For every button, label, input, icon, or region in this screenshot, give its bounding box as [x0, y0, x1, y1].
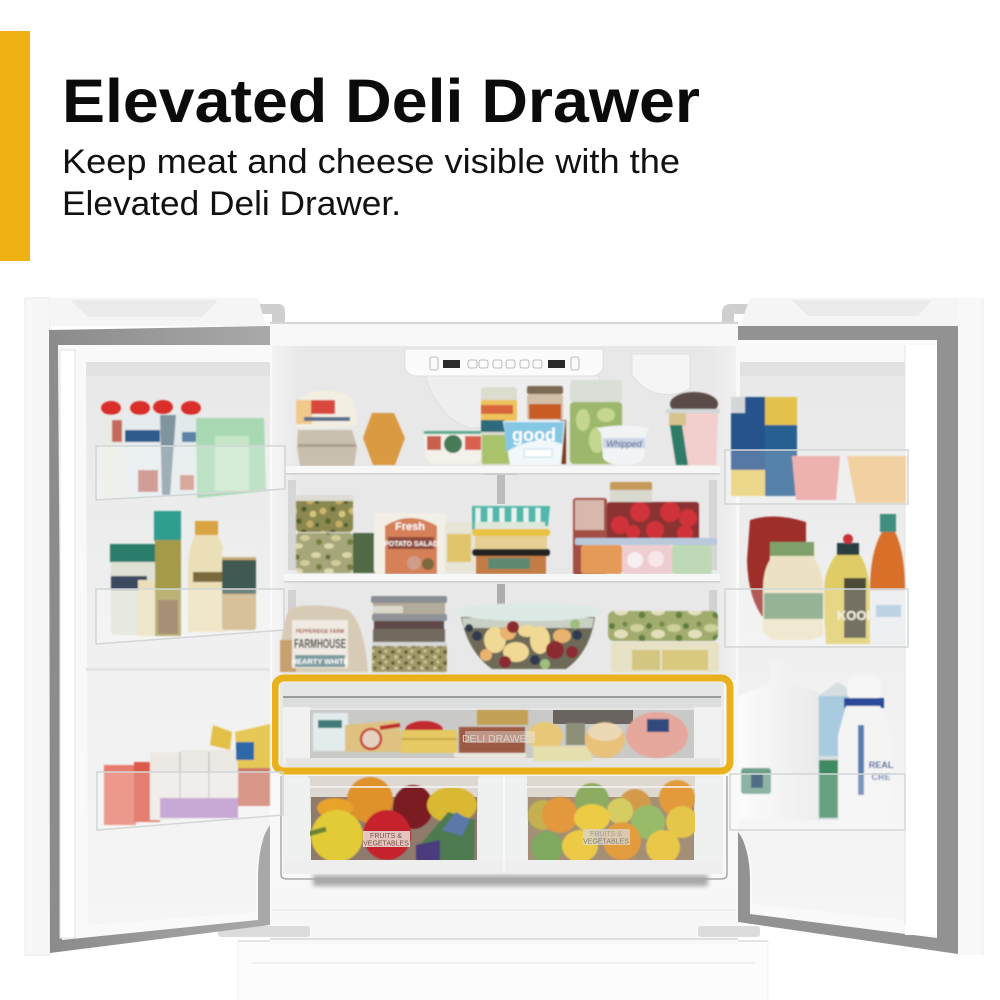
parfait cup [666, 392, 720, 465]
left door bin 3 [97, 772, 283, 830]
farmhouse bread: FARMHOUSE [294, 637, 346, 651]
subtitle: Elevated Deli Drawer. [62, 185, 401, 223]
highlight frame [275, 678, 730, 771]
green jar [570, 380, 622, 464]
whipped tub: Whipped [606, 439, 643, 449]
shadow under crispers [313, 875, 708, 886]
middle shelf food [296, 482, 717, 575]
accent bar [0, 31, 30, 261]
farmhouse bread [280, 605, 368, 672]
whipped tub [597, 426, 650, 465]
fruit bowl [455, 603, 603, 669]
rack rails [497, 474, 505, 504]
stacked containers [371, 596, 447, 672]
freezer drawer at bottom [238, 940, 768, 1000]
refrigerator photo [25, 298, 983, 1000]
salsa jar [527, 386, 566, 464]
back wall fan duct [425, 376, 600, 428]
good yogurt cup [503, 421, 565, 465]
citrus [528, 780, 698, 864]
hinge plates [218, 926, 310, 937]
deli drawer [280, 682, 724, 772]
potato salad tub: POTATO SALAD [384, 541, 438, 548]
crisper rail [281, 776, 727, 879]
lower shelf food [280, 596, 719, 672]
peppers and greens [305, 777, 477, 866]
muffin [363, 413, 405, 465]
left door [25, 298, 272, 955]
potato salad tub [374, 513, 446, 574]
right door bin 3 items: REAL [869, 760, 894, 770]
title: Elevated Deli Drawer [62, 67, 700, 135]
yellow label jar [481, 387, 517, 465]
bread bag and egg carton [295, 390, 358, 466]
right door bin 2 items [747, 514, 905, 645]
drawer label: DELI DRAWER [462, 733, 534, 745]
door inner panel [738, 340, 937, 938]
right door bin 2 [725, 589, 908, 647]
right door bin 1 items [731, 397, 906, 503]
crisper label left: FRUITS & [370, 833, 402, 840]
subtitle: Keep meat and cheese visible with the [62, 143, 680, 181]
left door bin 2 items [110, 511, 256, 636]
door gasket [738, 326, 958, 954]
control panel [405, 349, 603, 376]
crisper label left [363, 831, 410, 848]
upper shelf food [295, 380, 720, 466]
good yogurt cup: good [512, 425, 556, 445]
subtitle [62, 143, 680, 223]
deli meats and cheeses [313, 710, 688, 761]
salad tub [424, 431, 484, 464]
door gasket [49, 326, 270, 953]
right door bin 3 items: CRE [871, 772, 891, 782]
crisper label right: VEGETABLES [583, 838, 629, 846]
right door bin 3 [730, 774, 905, 830]
upper shelf [285, 466, 720, 474]
right crisper drawer [505, 776, 723, 874]
left door bin 1 [96, 446, 285, 500]
middle shelf [284, 574, 720, 582]
left door bin 2 [96, 589, 284, 644]
right door bin 3 items [738, 662, 894, 830]
crisper label right [583, 829, 630, 846]
center cabinet frame [218, 304, 765, 944]
door inner panel [58, 345, 272, 940]
lidded containers [575, 538, 717, 574]
small tub [445, 522, 475, 572]
stacked tubs [472, 506, 550, 574]
right door bin 1 [725, 450, 908, 504]
pasta containers [296, 495, 378, 573]
farmhouse bread: HEARTY WHITE [292, 657, 348, 666]
right door bin 2 items: KOOP [837, 608, 875, 623]
potato salad tub: Fresh [395, 521, 425, 533]
jars and strawberries [573, 482, 699, 575]
left door bin 3 items [104, 724, 270, 825]
left door bin 1 items [101, 400, 266, 498]
top hinge handles [243, 304, 285, 322]
salad and cheese containers [608, 611, 719, 672]
left crisper drawer [283, 776, 503, 874]
farmhouse bread: PEPPERIDGE FARM [296, 629, 344, 635]
right door [738, 298, 983, 955]
crisper label left: VEGETABLES [363, 840, 409, 848]
crisper label right: FRUITS & [590, 831, 622, 838]
